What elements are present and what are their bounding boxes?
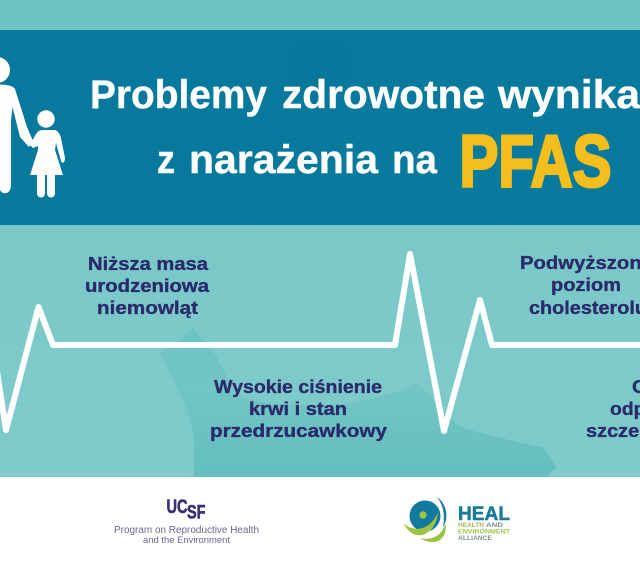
text block: raised cholesterol: cholesterolu — [529, 297, 640, 318]
logo: UCSF program: UC — [166, 497, 188, 518]
title: na — [392, 138, 438, 182]
title — [90, 73, 640, 202]
logo: UCSF program — [114, 497, 259, 545]
chart: heartbeat line — [0, 254, 640, 431]
logo: HEAL alliance: HEALTH — [458, 522, 484, 529]
logo: HEAL alliance: AND — [486, 522, 503, 529]
title: zdrowotne — [282, 73, 485, 117]
text block: high blood pressure — [210, 376, 388, 441]
title: wynika — [497, 73, 640, 117]
logo: HEAL alliance: ALLIANCE — [458, 535, 493, 542]
text block: raised cholesterol: poziom — [551, 274, 621, 295]
text block: high blood pressure: krwi i stan — [249, 398, 347, 419]
text block: low birth weight: Niższa masa — [88, 253, 209, 274]
title: narażenia — [189, 138, 379, 182]
text block: high blood pressure: Wysokie ciśnienie — [214, 376, 382, 397]
logo: HEAL alliance: HEAL — [458, 504, 510, 525]
title: z — [157, 138, 175, 182]
logo: UCSF program: Program on Reproductive Health — [114, 525, 259, 536]
text block: low birth weight: niemowląt — [97, 297, 198, 318]
text block: raised cholesterol — [520, 252, 640, 318]
text block: raised cholesterol: Podwyższony — [520, 252, 640, 273]
logo: HEAL alliance: ENVIRONMENT — [458, 528, 510, 536]
title: Problemy — [90, 73, 268, 117]
logo: UCSF program: and the Environment — [143, 535, 231, 545]
text block: weakened vaccine response — [586, 376, 640, 441]
text block: low birth weight — [85, 253, 210, 318]
logo: UCSF program: SF — [187, 502, 206, 524]
text block: high blood pressure: przedrzucawkowy — [210, 420, 388, 441]
icon: adult and child silhouette — [0, 57, 65, 198]
logo: HEAL alliance — [403, 497, 510, 542]
panel: header band — [0, 30, 640, 225]
text block: low birth weight: urodzeniowa — [85, 275, 210, 296]
